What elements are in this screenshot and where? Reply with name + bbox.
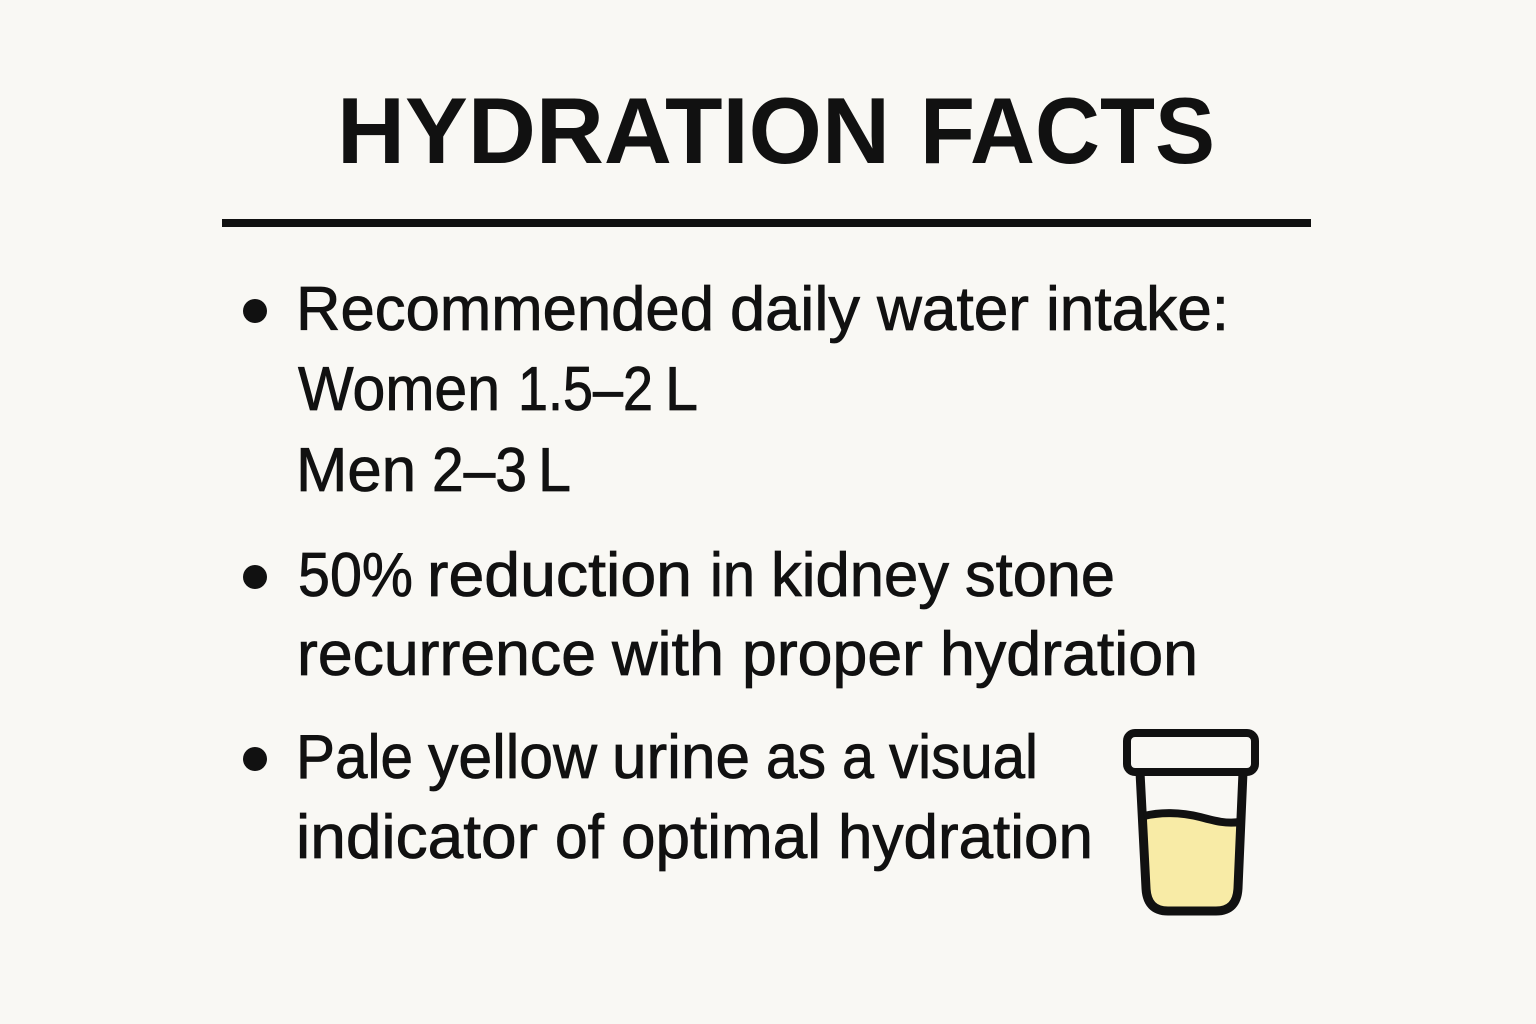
kidney stone line 2: with — [611, 620, 724, 689]
women intake: Women — [298, 355, 500, 424]
kidney stone line 2: hydration — [940, 620, 1198, 689]
fact: kidney stone reduction — [243, 541, 1198, 689]
urine line 2: optimal — [621, 803, 821, 872]
icon: specimen cup — [1127, 733, 1255, 911]
kidney stone line 1: 50% — [298, 541, 413, 610]
bullet 1 — [243, 299, 267, 323]
title — [337, 78, 1215, 183]
bullet 3 — [243, 747, 267, 771]
women intake: 1.5–2 — [518, 355, 653, 424]
urine line 1 — [296, 723, 1038, 792]
urine line 1: urine — [612, 723, 750, 792]
urine line 1: as — [766, 723, 826, 792]
bullet 2 — [243, 565, 267, 589]
kidney stone line 1: reduction — [427, 541, 692, 610]
urine line 1: visual — [889, 723, 1038, 792]
urine line 1: Pale — [296, 723, 413, 792]
women intake: L — [665, 355, 698, 424]
intake heading: intake: — [1046, 275, 1229, 344]
title: HYDRATION — [337, 78, 890, 183]
intake heading: water — [876, 275, 1029, 344]
urine line 2: of — [555, 803, 605, 872]
kidney stone line 1: in — [710, 541, 755, 610]
urine line 2 — [296, 803, 1093, 872]
kidney stone line 1 — [298, 541, 1115, 610]
intake heading — [296, 275, 1229, 344]
fact: recommended daily water intake — [243, 275, 1229, 505]
urine line 2: indicator — [296, 803, 538, 872]
kidney stone line 2 — [297, 620, 1198, 689]
kidney stone line 2: proper — [742, 620, 923, 689]
kidney stone line 1: kidney — [771, 541, 949, 610]
men intake: Men — [296, 436, 416, 505]
fact: pale yellow urine — [243, 723, 1093, 872]
kidney stone line 2: recurrence — [297, 620, 596, 689]
intake heading: daily — [730, 275, 860, 344]
women intake — [298, 355, 698, 424]
men intake: 2–3 — [432, 436, 527, 505]
men intake: L — [538, 436, 571, 505]
urine line 1: a — [842, 723, 874, 792]
title: FACTS — [920, 78, 1215, 183]
urine line 1: yellow — [428, 723, 597, 792]
men intake — [296, 436, 571, 505]
intake heading: Recommended — [296, 275, 714, 344]
urine line 2: hydration — [838, 803, 1093, 872]
kidney stone line 1: stone — [965, 541, 1115, 610]
